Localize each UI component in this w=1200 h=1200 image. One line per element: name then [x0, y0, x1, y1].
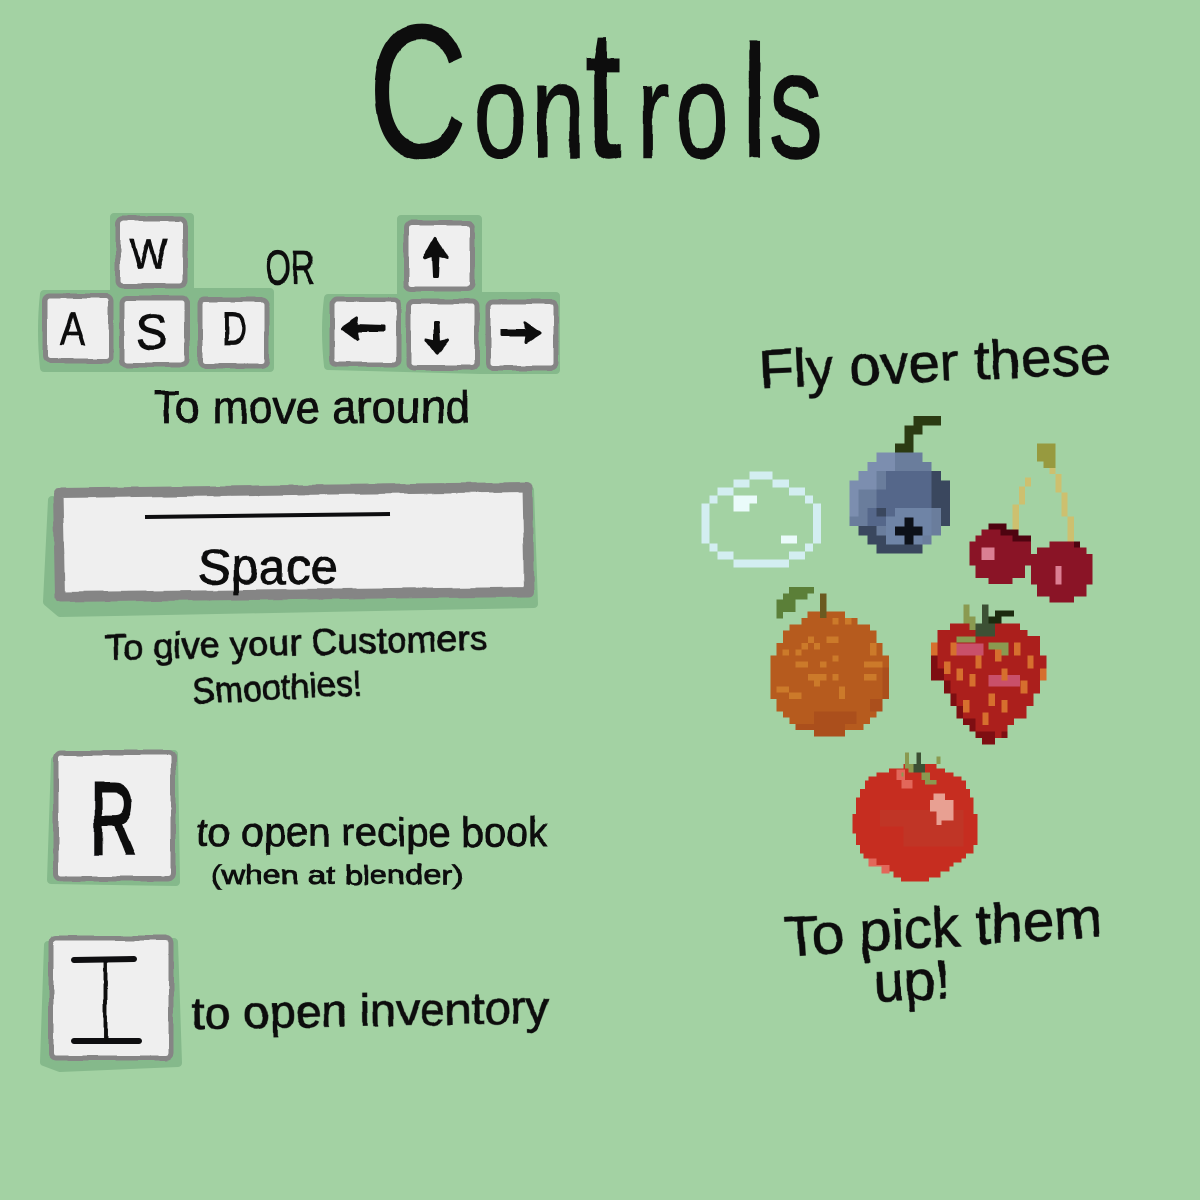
caption: customers — [104, 617, 488, 712]
icon: tomato — [852, 752, 978, 882]
key label: R — [90, 763, 136, 875]
icon: blueberry — [849, 416, 950, 554]
icon: orange — [770, 587, 889, 736]
key group: WASD — [42, 217, 270, 368]
caption: to pick them up: To pick them — [782, 886, 1103, 968]
key: D: D — [222, 302, 247, 355]
caption: recipe book: (when at blender) — [211, 860, 463, 890]
key: S — [122, 298, 187, 365]
panel: space bar — [47, 487, 534, 613]
space bar indent line — [145, 514, 390, 517]
key: space — [58, 487, 529, 597]
fruit sprites — [701, 416, 1092, 882]
title: o — [474, 35, 527, 186]
title: o — [675, 35, 729, 186]
key: R — [56, 753, 173, 879]
caption: recipe book: to open recipe book — [197, 809, 548, 855]
title: s — [769, 22, 823, 189]
key: W — [118, 219, 185, 286]
caption: customers: To give your Customers — [104, 617, 488, 668]
caption: fly over these: Fly over these — [758, 324, 1112, 401]
key label: Space — [198, 539, 338, 595]
title: n — [531, 35, 585, 186]
label: OR: OR — [265, 242, 315, 295]
title: r — [637, 35, 669, 186]
caption: customers: Smoothies! — [191, 662, 363, 712]
panel: movement keys — [42, 217, 556, 433]
key: down arrow — [409, 301, 477, 368]
key: W: W — [130, 230, 168, 279]
panel: I key — [44, 938, 178, 1068]
caption: recipe book — [197, 809, 548, 890]
key label: I — [100, 939, 111, 1066]
key: I — [51, 938, 171, 1058]
key: left arrow — [332, 299, 399, 364]
key: A — [45, 296, 111, 361]
icon: strawberry — [931, 604, 1046, 744]
key: D — [200, 299, 267, 366]
panel: R key — [51, 753, 176, 882]
key: A: A — [60, 303, 85, 356]
title: l — [742, 12, 767, 191]
key shadow — [47, 490, 534, 613]
key: S: S — [136, 304, 168, 360]
caption: to move around: To move around — [153, 381, 470, 433]
caption: to pick them up: up! — [872, 947, 952, 1014]
icon: bubble — [701, 472, 821, 568]
key group: arrows — [326, 219, 556, 370]
caption: to pick them up — [782, 886, 1103, 1014]
key: up arrow — [406, 223, 473, 289]
key: right arrow — [488, 302, 556, 368]
caption: inventory: to open inventory — [191, 982, 550, 1039]
icon: cherries — [969, 443, 1092, 603]
